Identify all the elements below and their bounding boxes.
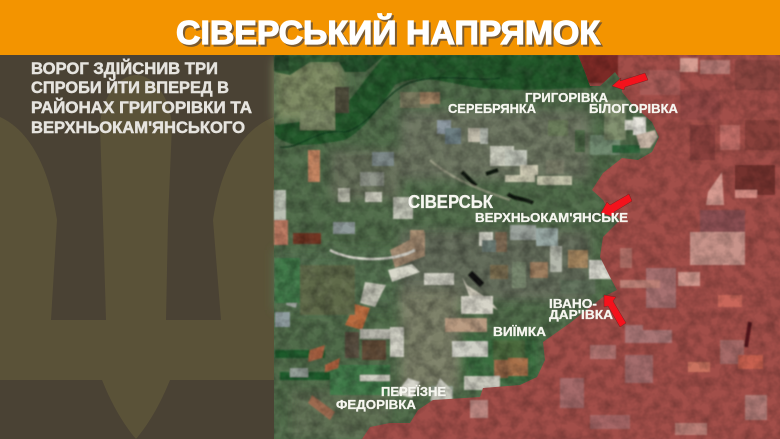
- title: СІВЕРСЬКИЙ НАПРЯМОК: [176, 13, 601, 51]
- text block: summary: [31, 59, 252, 137]
- map labels: ГРИГОРІВКА: [525, 90, 609, 105]
- arrow: Hryhorivka: [612, 73, 648, 90]
- text block: summary: ВОРОГ ЗДІЙСНИВ ТРИ: [31, 59, 218, 78]
- title: СІВЕРСЬКИЙ НАПРЯМОК: [178, 15, 603, 53]
- map labels: ІВАНО-: [549, 296, 597, 311]
- red occupied territory: [362, 55, 780, 439]
- header bar: [0, 0, 780, 55]
- map labels: СЕРЕБРЯНКА: [448, 101, 537, 116]
- map labels: СІВЕРСЬК: [408, 192, 494, 212]
- map labels: [336, 90, 679, 412]
- text block: summary: СПРОБИ ЙТИ ВПЕРЕД В: [31, 78, 229, 97]
- map labels: ДАР'ІВКА: [549, 307, 614, 322]
- map labels: ВЕРХНЬОКАМ'ЯНСЬКЕ: [475, 210, 628, 225]
- fields: north and centre: [300, 110, 335, 130]
- icon: trident emblem: [0, 75, 274, 439]
- map: [274, 55, 780, 439]
- map labels: ПЕРЕЇЗНЕ: [381, 384, 446, 399]
- fields: south-west: [360, 282, 386, 307]
- arrow: Ivano-Darivka: [604, 295, 626, 327]
- dark ponds: [462, 170, 533, 203]
- forest and river: [275, 55, 615, 145]
- text block: summary: РАЙОНАХ ГРИГОРІВКИ ТА: [31, 98, 252, 117]
- panel: left sidebar: [0, 55, 274, 439]
- map labels: БІЛОГОРІВКА: [589, 101, 679, 116]
- arrow: Verkhnokamianske: [601, 194, 632, 217]
- map labels: ВИЇМКА: [493, 324, 547, 339]
- text block: summary: ВЕРХНЬОКАМ'ЯНСЬКОГО: [31, 119, 245, 137]
- map labels: ФЕДОРІВКА: [336, 397, 417, 412]
- map texture: [274, 55, 780, 439]
